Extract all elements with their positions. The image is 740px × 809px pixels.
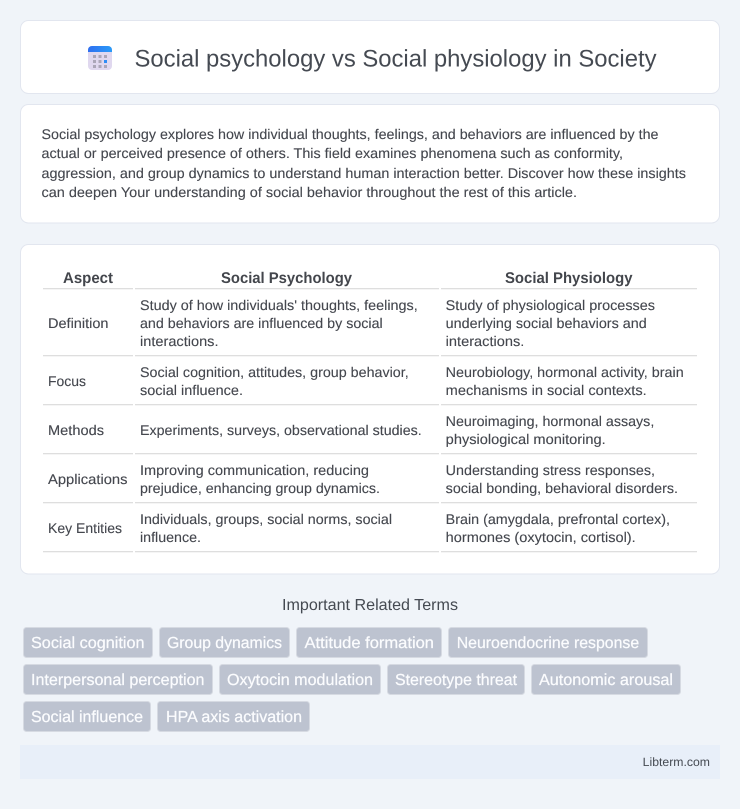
intro text: can deepen Your understanding of social behavior throughout the rest of this article. xyxy=(42,184,577,200)
row: definition xyxy=(43,297,697,356)
panel: comparison table xyxy=(20,244,720,574)
title: Social psychology vs Social physiology in Society xyxy=(134,46,656,72)
icon: calendar xyxy=(88,46,112,70)
row: key entities: Individuals, groups, social norms, social xyxy=(140,511,392,527)
tag: stereotype threat xyxy=(388,664,524,694)
tag: social influence: Social influence xyxy=(31,709,143,726)
row: applications: Applications xyxy=(48,471,128,487)
tag: interpersonal perception xyxy=(24,664,212,694)
tag: neuroendocrine response: Neuroendocrine response xyxy=(457,635,639,652)
tag: autonomic arousal: Autonomic arousal xyxy=(539,672,673,689)
tag: social cognition: Social cognition xyxy=(31,635,144,652)
table header row xyxy=(43,270,697,289)
row: focus: Neurobiology, hormonal activity, brain xyxy=(446,364,684,380)
row: focus xyxy=(43,364,697,405)
panel: header xyxy=(20,20,720,94)
panel: introduction xyxy=(20,104,720,223)
row: focus: social influence. xyxy=(140,382,243,398)
table header row: Social Physiology xyxy=(505,270,633,287)
row: methods xyxy=(43,413,697,454)
row: applications: Understanding stress responses, xyxy=(446,462,655,478)
tag: autonomic arousal xyxy=(532,664,680,694)
row: key entities: Brain (amygdala, prefrontal cortex), xyxy=(446,511,670,527)
row: definition: Study of physiological processes xyxy=(446,297,655,313)
tag: group dynamics xyxy=(160,628,290,658)
heading: important related terms: Important Related Terms xyxy=(282,597,458,614)
tag: hpa axis activation xyxy=(158,702,310,732)
row: focus: Social cognition, attitudes, group behavior, xyxy=(140,364,409,380)
row: applications: social bonding, behavioral disorders. xyxy=(446,480,678,496)
row: definition: Definition xyxy=(48,315,108,331)
tag: social influence xyxy=(24,702,150,732)
intro text: aggression, and group dynamics to understand human interaction better. Discover how these insights xyxy=(42,165,686,181)
row: methods: Methods xyxy=(48,422,104,438)
intro text: actual or perceived presence of others. This field examines phenomena such as conformity, xyxy=(42,145,623,161)
row: definition: underlying social behaviors and xyxy=(446,315,647,331)
panel: related term tags xyxy=(24,628,680,732)
row: applications: prejudice, enhancing group dynamics. xyxy=(140,480,380,496)
tag: oxytocin modulation xyxy=(220,664,380,694)
table header row: Aspect xyxy=(63,270,113,287)
row: key entities xyxy=(43,511,697,552)
intro text xyxy=(42,126,686,200)
tag: neuroendocrine response xyxy=(448,628,648,658)
tag: oxytocin modulation: Oxytocin modulation xyxy=(227,672,373,689)
row: methods: Neuroimaging, hormonal assays, xyxy=(446,413,654,429)
row: key entities: Key Entities xyxy=(48,520,122,536)
row: key entities: hormones (oxytocin, cortisol). xyxy=(446,529,636,545)
tag: group dynamics: Group dynamics xyxy=(167,635,282,652)
tag: stereotype threat: Stereotype threat xyxy=(395,672,518,689)
row: definition: and behaviors are influenced by social xyxy=(140,315,383,331)
row: definition: interactions. xyxy=(140,333,218,349)
tag: attitude formation xyxy=(296,628,442,658)
row: definition: interactions. xyxy=(446,333,524,349)
tag: social cognition xyxy=(24,628,152,658)
tag: attitude formation: Attitude formation xyxy=(304,635,434,652)
row: focus: mechanisms in social contexts. xyxy=(446,382,647,398)
row: definition: Study of how individuals' thoughts, feelings, xyxy=(140,297,418,313)
row: focus: Focus xyxy=(48,373,86,389)
row: applications: Improving communication, reducing xyxy=(140,462,369,478)
row: methods: Experiments, surveys, observational studies. xyxy=(140,422,422,438)
footer credit: Libterm.com xyxy=(643,755,710,769)
intro text: Social psychology explores how individual thoughts, feelings, and behaviors are influenced by the xyxy=(42,126,659,142)
row: key entities: influence. xyxy=(140,529,201,545)
table header row: Social Psychology xyxy=(221,270,352,287)
tag: hpa axis activation: HPA axis activation xyxy=(166,709,302,726)
row: methods: physiological monitoring. xyxy=(446,431,606,447)
tag: interpersonal perception: Interpersonal perception xyxy=(31,672,204,689)
row: applications xyxy=(43,462,697,503)
footer xyxy=(20,745,720,779)
